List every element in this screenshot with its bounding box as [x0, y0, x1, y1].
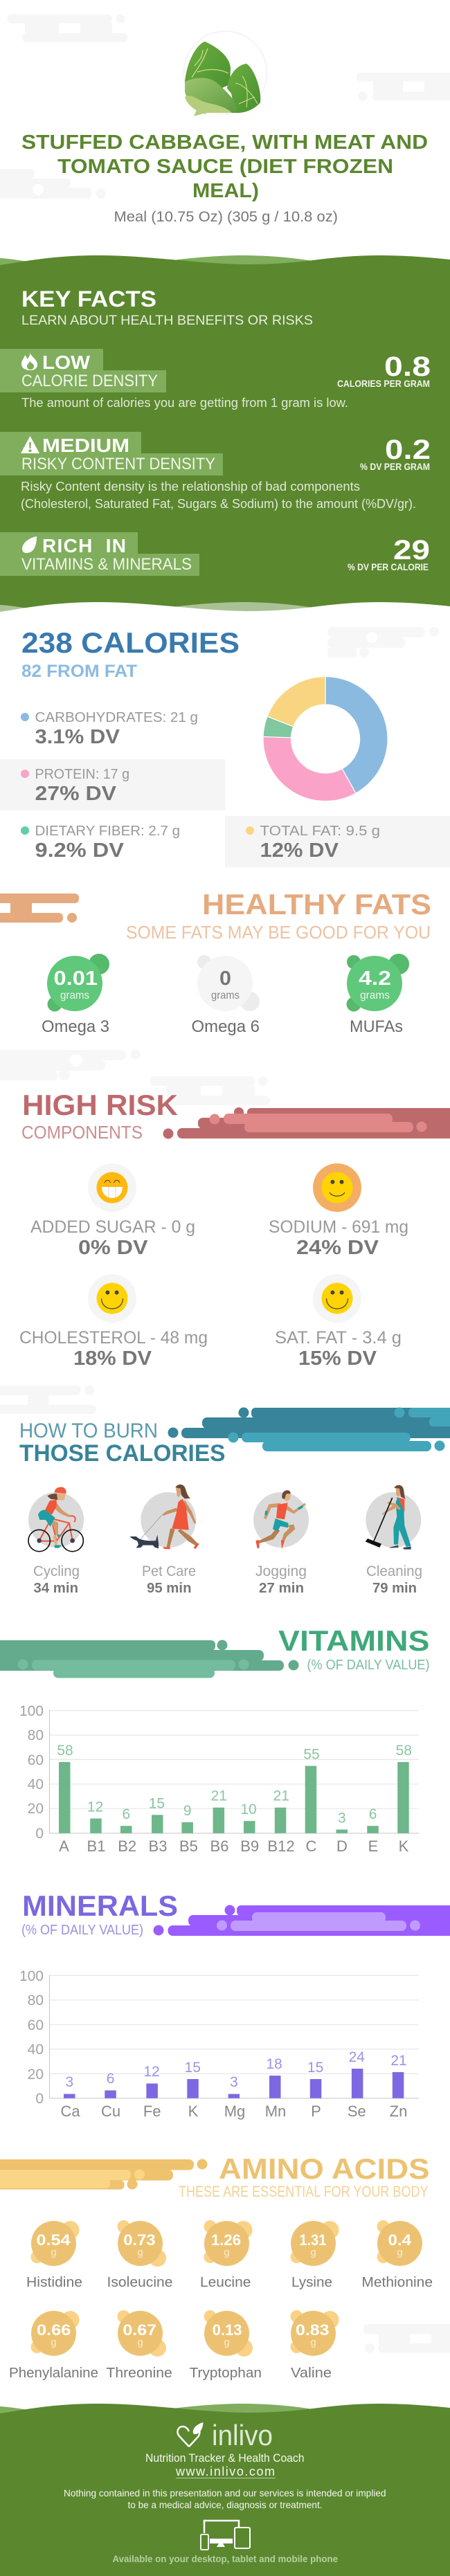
value: 79 min: 79 min	[372, 1581, 417, 1596]
title	[21, 131, 428, 202]
title: TOMATO SAUCE (DIET FROZEN	[57, 156, 393, 178]
badge: MUFAs	[346, 954, 409, 1036]
legend: total fat	[225, 816, 450, 867]
value: 34 min: 34 min	[33, 1581, 78, 1596]
label: pet care: Pet Care	[142, 1563, 196, 1579]
chart: minerals bar chart: 6	[107, 2071, 114, 2087]
chart: vitamins bar chart: B12	[267, 1838, 295, 1855]
badge: methionine: g	[397, 2247, 403, 2258]
chart: vitamins bar chart: 100	[19, 1703, 44, 1719]
badge: omega 3: 0.01	[54, 968, 98, 990]
badge: leucine	[200, 2220, 252, 2290]
icon: flame	[21, 352, 37, 370]
legend: dietary fiber	[21, 824, 180, 862]
panel: minerals	[19, 1889, 450, 2120]
icon: leaf	[22, 536, 37, 553]
chart: vitamins bar chart: K	[399, 1838, 409, 1855]
legend: carbohydrates	[21, 710, 198, 748]
subheading: LEARN ABOUT HEALTH BENEFITS OR RISKS	[21, 314, 313, 328]
chart: minerals bar chart: Fe	[143, 2103, 161, 2120]
chart: vitamins bar chart: 58	[57, 1743, 73, 1759]
decoration: burn streaks	[168, 1408, 450, 1451]
badge: valine	[291, 2310, 339, 2381]
background cloud: amino	[363, 2324, 450, 2353]
description: Risky Content density is the relationship of bad components	[21, 480, 360, 493]
unit: % DV per calorie: % DV PER CALORIE	[348, 561, 429, 572]
subheading: COMPONENTS	[21, 1122, 143, 1143]
description: The amount of calories you are getting from 1 gram is low.	[21, 396, 348, 410]
badge: isoleucine: Isoleucine	[107, 2275, 173, 2290]
subheading: (% OF DAILY VALUE)	[307, 1658, 429, 1673]
activity: cycling	[28, 1487, 84, 1596]
badge: omega 6: grams	[211, 990, 240, 1001]
description: (Cholesterol, Saturated Fat, Sugars & Sodium) to the amount (%DV/gr).	[21, 497, 416, 511]
icon: inlivo heart logo	[178, 2422, 204, 2447]
label: rich in: RICH IN	[42, 535, 126, 556]
chart: vitamins bar chart: 0	[35, 1826, 44, 1842]
panel: amino acids	[0, 2152, 433, 2381]
badge: threonine: Threonine	[106, 2366, 172, 2381]
chart: minerals bar chart: Ca	[61, 2103, 80, 2120]
value: 29: 29	[393, 535, 430, 565]
chart: vitamins bar chart: B1	[87, 1838, 105, 1855]
decoration: mineral streaks	[154, 1905, 450, 1936]
chart: minerals bar chart: 100	[19, 1968, 44, 1984]
panel: calories and macronutrients	[0, 626, 450, 867]
icon: smiling face	[321, 1172, 353, 1203]
badge: lysine: g	[310, 2247, 316, 2258]
chart: vitamins bar chart: 10	[240, 1802, 257, 1817]
background cloud: burn	[0, 1386, 96, 1414]
item: added sugar: ADDED SUGAR - 0 g	[30, 1217, 195, 1237]
badge: valine: Valine	[291, 2366, 332, 2381]
chart: minerals bar chart: 3	[230, 2074, 238, 2090]
badge: leucine: g	[224, 2247, 230, 2258]
background cloud: left of title	[0, 169, 106, 199]
chart: vitamins bar chart: 21	[273, 1788, 289, 1804]
unit: % DV per gram: % DV PER GRAM	[360, 461, 430, 472]
badge: isoleucine: 0.73	[123, 2231, 156, 2249]
legend: carbohydrates: CARBOHYDRATES: 21 g	[35, 710, 198, 725]
label: risky content density: RISKY CONTENT DENSITY	[21, 455, 215, 473]
badge: phenylalanine	[9, 2311, 98, 2381]
chart: vitamins bar chart: 6	[123, 1806, 130, 1822]
title: MEAL)	[192, 180, 259, 202]
panel: key facts	[0, 255, 450, 617]
subheading: SOME FATS MAY BE GOOD FOR YOU	[126, 922, 431, 943]
badge: tryptophan: Tryptophan	[190, 2366, 262, 2381]
chart: vitamins bar chart: B2	[118, 1838, 136, 1855]
badge: methionine: Methionine	[361, 2275, 433, 2290]
fact: rich in vitamins and minerals	[0, 532, 430, 576]
heading: HIGH RISK	[22, 1089, 178, 1121]
badge: omega 6: Omega 6	[191, 1017, 260, 1036]
legend: dietary fiber: DIETARY FIBER: 2.7 g	[35, 824, 180, 839]
badge: phenylalanine: g	[51, 2337, 57, 2348]
panel: footer	[0, 2404, 450, 2576]
title: STUFFED CABBAGE, WITH MEAT AND	[21, 131, 428, 154]
badge: leucine: 1.26	[211, 2231, 241, 2249]
value: 0.8: 0.8	[384, 352, 431, 382]
icon: smiling face	[97, 1283, 127, 1314]
item: sodium	[269, 1163, 408, 1259]
activity: cleaning	[366, 1485, 422, 1596]
legend: protein: PROTEIN: 17 g	[35, 767, 129, 782]
disclaimer: Nothing contained in this presentation and our services is intended or implied	[64, 2487, 386, 2498]
chart: vitamins bar chart	[19, 1703, 419, 1855]
legend: protein: 27% DV	[35, 783, 117, 805]
icon: jogger	[253, 1490, 309, 1550]
badge: omega 3: grams	[60, 990, 89, 1001]
chart: minerals bar chart	[19, 1968, 419, 2120]
chart: minerals bar chart: 40	[28, 2042, 44, 2058]
chart: vitamins bar chart: 58	[396, 1743, 412, 1759]
badge: threonine	[106, 2310, 172, 2381]
badge: phenylalanine: 0.66	[37, 2321, 71, 2339]
chart: vitamins bar chart: D	[336, 1838, 348, 1855]
chart: minerals bar chart: 0	[35, 2091, 44, 2107]
chart: vitamins bar chart: B3	[149, 1838, 167, 1855]
fact: medium risky content density	[0, 432, 431, 511]
chart: vitamins bar chart: B5	[179, 1838, 198, 1855]
item: sodium: 24% DV	[296, 1237, 379, 1259]
chart: minerals bar chart: 15	[307, 2060, 323, 2076]
heading: HEALTHY FATS	[202, 888, 431, 920]
fact: low calorie density	[0, 349, 431, 410]
legend: carbohydrates: 3.1% DV	[35, 726, 120, 748]
item: saturated fat: SAT. FAT - 3.4 g	[275, 1328, 402, 1348]
badge: methionine: 0.4	[388, 2231, 412, 2249]
chart: minerals bar chart: Cu	[101, 2103, 120, 2120]
availability note: Available on your desktop, tablet and mobile phone	[112, 2553, 338, 2564]
chart: vitamins bar chart: 60	[28, 1752, 44, 1768]
activity: jogging	[253, 1490, 309, 1596]
decoration: healthy fats streaks	[0, 894, 79, 923]
legend: total fat: TOTAL FAT: 9.5 g	[260, 824, 380, 839]
activity: pet care	[130, 1485, 199, 1596]
icon: cyclist	[28, 1487, 84, 1552]
chart: vitamins bar chart: E	[368, 1838, 378, 1855]
badge: phenylalanine: Phenylalanine	[9, 2366, 98, 2381]
badge: histidine: Histidine	[26, 2275, 82, 2290]
badge: isoleucine: g	[137, 2247, 143, 2258]
tagline: Nutrition Tracker & Health Coach	[145, 2451, 305, 2465]
chart: vitamins bar chart: 3	[338, 1811, 346, 1826]
decoration: amino streaks	[0, 2159, 208, 2190]
description	[21, 480, 416, 511]
badge: isoleucine	[107, 2220, 173, 2290]
heading: 238 calories: 238 CALORIES	[21, 626, 240, 659]
badge: lysine: Lysine	[291, 2275, 332, 2290]
chart: vitamins bar chart: B9	[240, 1838, 259, 1855]
panel: high risk components	[19, 1089, 450, 1370]
badge: leucine: Leucine	[200, 2275, 251, 2290]
chart: minerals bar chart: P	[311, 2103, 321, 2120]
chart: minerals bar chart: 3	[65, 2074, 73, 2090]
chart: vitamins bar chart: B6	[210, 1838, 228, 1855]
decoration: vitamin streaks	[0, 1640, 299, 1678]
item: sodium: SODIUM - 691 mg	[269, 1217, 408, 1237]
badge: MUFAs: 4.2	[359, 968, 391, 990]
unit: calories per gram: CALORIES PER GRAM	[337, 378, 430, 389]
badge: tryptophan	[190, 2310, 262, 2381]
background cloud: top left	[7, 14, 127, 42]
icon: warning triangle	[21, 436, 39, 453]
background cloud: top right	[357, 73, 450, 101]
chart: vitamins bar chart: 6	[369, 1806, 377, 1822]
chart: minerals bar chart: Mn	[265, 2103, 286, 2120]
badge: threonine: 0.67	[123, 2321, 156, 2339]
badge: MUFAs: grams	[360, 990, 390, 1001]
heading: MINERALS	[22, 1889, 178, 1922]
legend: protein	[0, 759, 226, 810]
chart: minerals bar chart: Se	[348, 2103, 366, 2120]
heading: those calories: THOSE CALORIES	[19, 1440, 226, 1467]
label: jogging: Jogging	[255, 1563, 307, 1579]
badge: histidine: g	[51, 2247, 57, 2258]
chart: vitamins bar chart: 20	[28, 1801, 44, 1817]
item: cholesterol	[19, 1274, 208, 1370]
legend: dietary fiber: 9.2% DV	[35, 840, 125, 862]
heading: how to burn: HOW TO BURN	[19, 1419, 158, 1442]
chart: vitamins bar chart: 9	[183, 1803, 192, 1819]
badge: methionine	[361, 2220, 433, 2290]
heading: AMINO ACIDS	[219, 2152, 429, 2185]
badge: MUFAs: MUFAs	[350, 1017, 403, 1036]
value: 95 min: 95 min	[147, 1581, 191, 1596]
chart: minerals bar chart: K	[188, 2103, 199, 2120]
chart: minerals bar chart: Zn	[390, 2103, 407, 2120]
label: cycling: Cycling	[33, 1563, 80, 1579]
icon: smiling face	[321, 1283, 353, 1314]
label: vitamins and minerals: VITAMINS & MINERALS	[21, 555, 192, 574]
chart: minerals bar chart: 21	[390, 2053, 407, 2069]
subheading: 82 from fat: 82 FROM FAT	[21, 662, 137, 681]
label: medium: MEDIUM	[42, 435, 129, 456]
panel: how to burn those calories	[19, 1408, 450, 1596]
value: 27 min: 27 min	[259, 1581, 304, 1596]
badge: histidine	[26, 2221, 82, 2290]
chart: vitamins bar chart: A	[59, 1838, 69, 1855]
website link: www.inlivo.com	[175, 2465, 275, 2478]
background clouds: high risk	[0, 1050, 270, 1105]
legend: total fat: 12% DV	[260, 840, 339, 862]
panel: vitamins	[0, 1624, 429, 1855]
badge: valine: 0.83	[296, 2321, 330, 2339]
item: saturated fat	[275, 1274, 402, 1370]
chart: minerals bar chart: 80	[28, 1993, 44, 2008]
badge: omega 3	[42, 954, 109, 1036]
chart: minerals bar chart: 60	[28, 2017, 44, 2033]
decoration: high risk streaks	[163, 1107, 450, 1139]
heading: VITAMINS	[278, 1624, 429, 1657]
chart: vitamins bar chart: 55	[303, 1747, 320, 1762]
badge: tryptophan: g	[224, 2337, 230, 2348]
chart: minerals bar chart: 12	[143, 2064, 160, 2080]
badge: omega 6	[191, 955, 260, 1036]
value: 0.2: 0.2	[385, 435, 431, 465]
serving size: Meal (10.75 Oz) (305 g / 10.8 oz)	[114, 209, 338, 225]
badge: omega 6: 0	[219, 968, 231, 990]
item: added sugar	[30, 1163, 195, 1259]
chart: vitamins bar chart: C	[305, 1838, 316, 1855]
item: cholesterol: CHOLESTEROL - 48 mg	[19, 1328, 208, 1348]
label: calorie density: CALORIE DENSITY	[21, 372, 158, 390]
chart: minerals bar chart: Mg	[224, 2103, 245, 2120]
hero image: cabbage	[184, 31, 267, 116]
item: saturated fat: 15% DV	[298, 1348, 377, 1370]
badge: histidine: 0.54	[36, 2231, 71, 2249]
chart: vitamins bar chart: 12	[87, 1799, 103, 1815]
subheading: (% OF DAILY VALUE)	[21, 1923, 143, 1938]
chart: minerals bar chart: 18	[266, 2056, 282, 2072]
icon: devices	[201, 2521, 250, 2550]
disclaimer: to be a medical advice, diagnosis or treatment.	[127, 2499, 323, 2510]
label: low: LOW	[42, 352, 91, 373]
icon: woman walking dog	[130, 1485, 199, 1549]
icon: grinning face	[97, 1172, 127, 1203]
badge: threonine: g	[137, 2337, 143, 2348]
background cloud: calories	[327, 627, 439, 657]
chart: vitamins bar chart: 80	[28, 1727, 44, 1743]
icon: woman sweeping	[366, 1485, 421, 1550]
item: added sugar: 0% DV	[78, 1237, 148, 1259]
badge: tryptophan: 0.13	[213, 2321, 242, 2339]
badge: omega 3: Omega 3	[42, 1017, 109, 1036]
chart: vitamins bar chart: 40	[28, 1777, 44, 1793]
panel: healthy fats	[0, 888, 431, 1036]
label: cleaning: Cleaning	[366, 1563, 422, 1579]
badge: lysine	[291, 2221, 339, 2290]
heading: key facts: KEY FACTS	[21, 287, 156, 311]
chart: minerals bar chart: 15	[185, 2060, 201, 2076]
logo wordmark: inlivo	[212, 2419, 273, 2451]
chart: macronutrient donut	[263, 677, 388, 801]
disclaimer	[64, 2487, 386, 2510]
chart: minerals bar chart: 20	[28, 2067, 44, 2083]
chart: vitamins bar chart: 15	[149, 1795, 165, 1811]
badge: valine: g	[310, 2337, 316, 2348]
item: cholesterol: 18% DV	[73, 1348, 152, 1370]
chart: minerals bar chart: 24	[349, 2049, 365, 2065]
badge: lysine: 1.31	[299, 2231, 326, 2249]
chart: vitamins bar chart: 21	[211, 1788, 227, 1804]
